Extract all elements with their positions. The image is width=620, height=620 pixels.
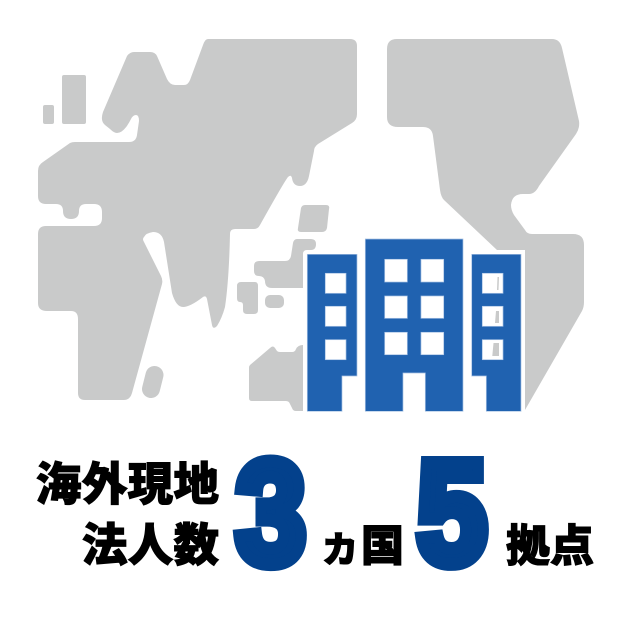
number: 5: 5 (417, 431, 487, 594)
number: 3: 3 (236, 431, 306, 594)
world map (38, 39, 584, 411)
map: island upper right (298, 205, 329, 232)
left building (307, 254, 357, 411)
right building (472, 254, 521, 411)
map: island left of building (237, 282, 258, 314)
map: Madagascar pill (151, 375, 154, 389)
map: small island pill (265, 295, 284, 308)
map: Australia shape (249, 345, 303, 411)
map: Japan shape (254, 239, 316, 288)
centre building (365, 239, 463, 411)
unit: 国: 国 (361, 523, 404, 571)
window slivers of map showing through (492, 277, 499, 356)
map: Eurasia and Africa (38, 39, 357, 400)
unit: カ: カ (322, 529, 358, 570)
map: small island rectangle (62, 75, 86, 124)
heading: 法人数: 法人数 (82, 520, 219, 571)
map: small island (43, 105, 54, 124)
heading: 海外現地: 海外現地 (36, 459, 219, 510)
icon: office buildings (307, 239, 521, 411)
windows (325, 259, 503, 360)
unit: 拠点: 拠点 (506, 522, 594, 571)
map: Americas (387, 39, 584, 410)
